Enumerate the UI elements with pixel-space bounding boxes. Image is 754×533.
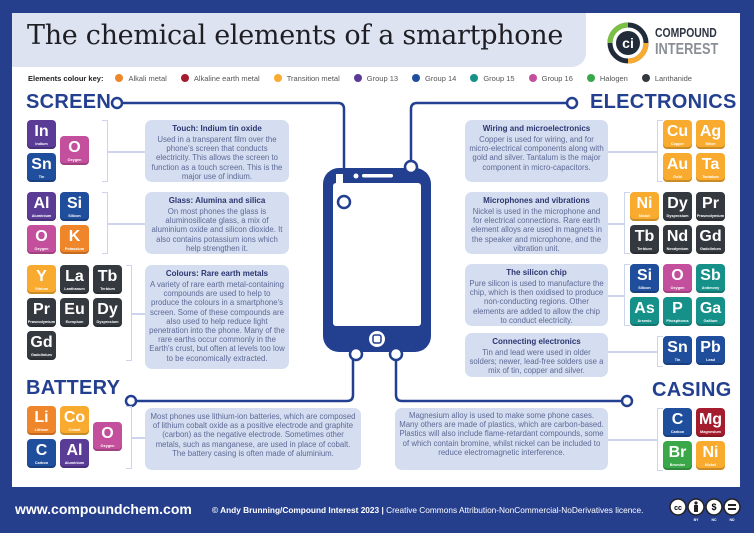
panel: screen glass [27,192,289,254]
icon: cc licence [669,498,741,522]
panel: screen colours: Y [36,268,47,285]
heading: electronics: ELECTRONICS [590,91,737,113]
panel: battery: C [36,442,47,459]
colour key: Alkaline earth metal [194,74,260,82]
header band [12,13,586,67]
footer url: www.compoundchem.com [15,501,192,517]
panel: electronics wiring: Cu [667,123,688,140]
panel: screen glass: Oxygen [35,247,48,251]
panel: battery [27,406,361,470]
panel: casing: Bromine [670,463,685,467]
panel: electronics chip: Arsenic [638,319,651,323]
panel: battery: Co [64,409,85,426]
panel: battery: O [101,425,114,442]
panel: electronics microphones: Pr [702,195,719,212]
colour key: Group 13 [367,74,398,82]
panel: electronics wiring: Tantalum [702,175,719,179]
panel: electronics chip: Sb [700,267,721,284]
panel: casing: Carbon [671,430,684,434]
panel: electronics wiring: Copper is used for wiring, and for micro-electrical components along with gold and silver. Tantalum is the major component in micro-capacitors. [469,135,604,172]
panel: screen colours: Europium [66,320,83,324]
colour key: Elements colour key: [28,74,103,82]
panel: screen glass: Potassium [65,247,84,251]
panel: electronics chip: Phosphorus [666,319,689,323]
colour key: Halogen [600,74,628,82]
text: colours: A variety of rare earth metal-containing compounds are used to help to produce the colours in a smartphone's screen. Some of these compounds are also used to help reduce light penetration into the phone. Many of the rare earths occur commonly in the Earth's crust, but often at levels too low to be economically extracted. [149,280,285,363]
text: glass: Glass: Alumina and silica [169,196,265,205]
panel: electronics connecting: Pb [700,339,721,356]
panel: electronics chip: O [671,267,684,284]
panel: electronics chip: Silicon [638,286,651,290]
text: touch: Used in a transparent film over the phone's screen that conducts electricity. This allows the screen to function as a touch screen. This is the major use of indium. [152,135,282,181]
panel: electronics chip: Antimony [702,286,719,290]
panel: electronics microphones: Dy [667,195,688,212]
panel: electronics wiring: Gold [673,175,682,179]
footer credit: © Andy Brunning/Compound Interest 2023 | Creative Commons Attribution-NonCommercial-NoDerivatives licence. [212,505,643,515]
panel: screen touch [27,120,289,182]
panel: battery: Li [34,409,49,426]
icon: cc licence: cc [674,505,682,512]
colour key: Group 15 [483,74,515,82]
panel: screen colours: Tb [98,268,117,285]
panel: screen colours: Gd [30,334,53,351]
panel: electronics wiring: Copper [671,142,684,146]
panel: electronics wiring: Au [667,156,688,173]
panel: casing [395,408,725,471]
panel: electronics chip: Oxygen [671,286,684,290]
panel: electronics chip: P [672,300,683,317]
heading: screen: SCREEN [26,91,111,113]
panel: casing: Br [669,444,686,461]
panel: electronics wiring: Ta [702,156,719,173]
panel: screen touch: Oxygen [68,158,81,162]
panel: electronics wiring [465,120,725,182]
logo [608,22,718,64]
panel: battery: Aluminium [65,461,84,465]
panel: electronics wiring: Wiring and microelectronics [483,124,590,133]
panel: electronics microphones: Praseodymium [697,214,724,218]
icon: cc licence: NC [711,518,717,522]
colour key [28,74,692,82]
panel: screen touch: Indium [35,142,48,146]
panel: casing: Ni [702,444,718,461]
icon: cc licence: $ [711,502,717,512]
panel: screen colours: Pr [33,301,50,318]
panel: electronics microphones: Nd [667,228,688,245]
panel: electronics connecting [465,333,725,377]
logo: ci [622,35,634,51]
title: The chemical elements of a smartphone [27,20,563,51]
panel: screen colours: Dysprosium [97,320,118,324]
heading: battery: BATTERY [26,377,120,399]
panel: electronics chip: Ga [700,300,721,317]
panel: screen touch: O [68,139,81,156]
panel: screen colours: Yttrium [35,287,48,291]
panel: screen colours: Lanthanum [64,287,85,291]
panel: electronics connecting: Tin [675,358,680,362]
panel: electronics microphones: Neodymium [667,247,688,251]
panel: electronics microphones: Nickel is used in the microphone and for electrical connections. Rare earth element alloys are used in magnets in the speaker and microphone, and the vibration unit. [471,207,602,253]
panel: screen glass: Aluminium [32,214,51,218]
panel: screen colours: Eu [64,301,85,318]
panel: electronics wiring: Ag [700,123,721,140]
text: touch: Touch: Indium tin oxide [172,124,262,133]
colour key: Lanthanide [655,74,692,82]
panel: electronics microphones: Ni [636,195,652,212]
panel: screen glass: K [69,228,80,245]
panel: electronics microphones: Tb [635,228,654,245]
panel: screen colours: La [65,268,84,285]
panel: casing: Mg [699,411,722,428]
panel: electronics chip: The silicon chip [506,268,567,277]
panel: electronics connecting: Connecting electronics [492,337,581,346]
panel: electronics chip: As [634,300,655,317]
panel: battery: Cobalt [69,428,80,432]
panel: electronics chip: Si [637,267,652,284]
panel: battery: Carbon [35,461,48,465]
panel: screen colours: Dy [97,301,118,318]
panel: electronics microphones: Dysprosium [667,214,688,218]
icon: cc licence: ND [729,518,735,522]
panel: casing: C [672,411,683,428]
panel: screen colours: Praseodymium [28,320,55,324]
panel: electronics connecting: Tin and lead were used in older solders; newer, lead-free solders use a mix of tin, copper and silver. [470,348,603,375]
panel: screen colours [27,265,289,369]
panel: electronics microphones [465,192,725,254]
panel: screen glass: O [35,228,48,245]
panel: battery: Lithium [35,428,48,432]
panel: electronics chip [465,264,725,326]
panel: electronics microphones: Nickel [639,214,650,218]
panel: electronics microphones: Gd [699,228,722,245]
panel: screen touch: In [34,123,49,140]
logo: COMPOUND [655,25,717,40]
logo: INTEREST [655,41,718,58]
text: glass: On most phones the glass is aluminosilicate glass, a mix of aluminium oxide and silicon dioxide. It also contains potassium ions which help strengthen it. [152,207,282,253]
panel: screen colours: Gadolinium [31,353,52,357]
panel: electronics chip: Gallium [704,319,717,323]
panel: casing: Magnesium alloy is used to make some phone cases. Many others are made of plastics, which are carbon-based. Plastics will also include flame-retardant compounds, some of which contain bromine, whilst nickel can be included to reduce electromagnetic interference. [399,411,604,457]
panel: screen touch: Tin [39,175,44,179]
panel: electronics microphones: Gadolinium [700,247,721,251]
heading: casing: CASING [652,379,732,401]
icon: cc licence: BY [694,518,699,522]
colour key: Group 16 [542,74,573,82]
panel: battery: Oxygen [101,444,114,448]
panel: electronics chip: Pure silicon is used to manufacture the chip, which is then oxidised to produce non-conducting regions. Other elements are added to allow the chip to conduct electricity. [469,279,604,325]
panel: electronics microphones: Terbium [637,247,652,251]
panel: electronics microphones: Microphones and vibrations [483,196,590,205]
panel: screen colours: Terbium [100,287,115,291]
panel: screen glass: Silicon [68,214,81,218]
colour key: Group 14 [425,74,456,82]
text: battery: Most phones use lithium-ion batteries, which are composed of lithium cobalt oxide as a positive electrode and graphite (carbon) as the negative electrode. Sometimes other metals, such as manganese, are used in place of cobalt. The battery casing is often made of aluminium. [150,412,356,458]
text: colours: Colours: Rare earth metals [166,269,268,278]
panel: electronics connecting: Lead [706,358,715,362]
panel: casing: Nickel [705,463,716,467]
panel: screen glass: Si [67,195,82,212]
panel: casing: Magnesium [700,430,721,434]
panel: electronics connecting: Sn [667,339,688,356]
colour key: Alkali metal [128,74,167,82]
panel: screen touch: Sn [31,156,52,173]
panel: electronics wiring: Silver [705,142,716,146]
text: touch [145,120,289,182]
text: glass [145,192,289,254]
colour key: Transition metal [287,74,340,82]
panel: battery: Al [66,442,82,459]
panel: screen glass: Al [34,195,50,212]
